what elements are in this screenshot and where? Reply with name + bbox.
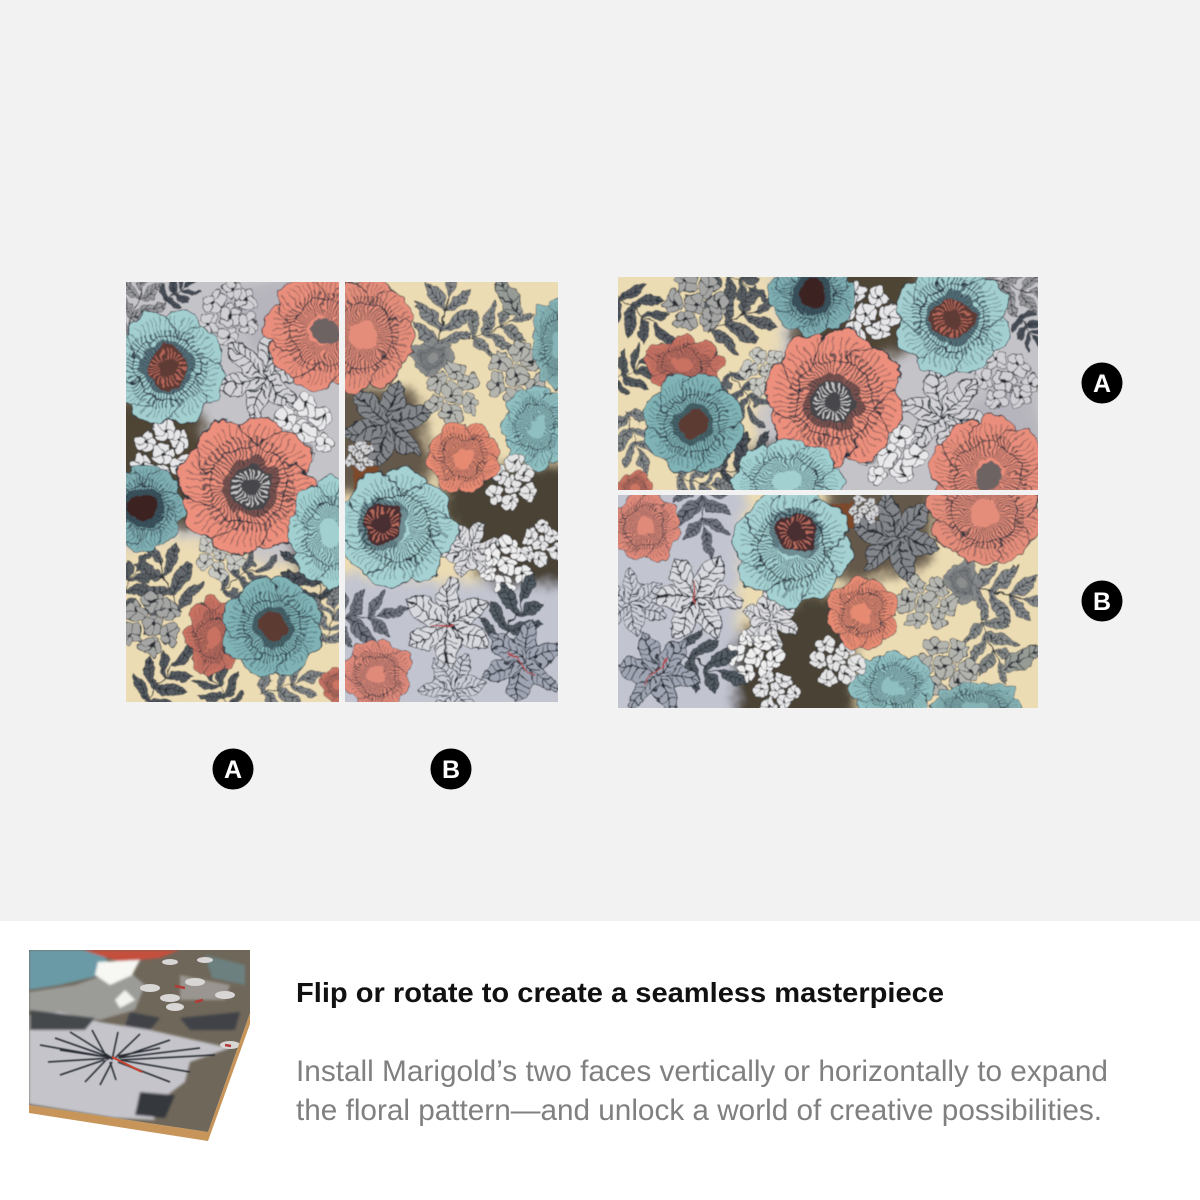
text block bbox=[296, 977, 1108, 1127]
floral board B, horizontal bbox=[618, 495, 1038, 708]
badge B, horizontal bbox=[1082, 580, 1122, 622]
panel: vertical layout bbox=[126, 282, 558, 790]
badge B, vertical: B bbox=[442, 756, 460, 784]
badge A, horizontal bbox=[1082, 362, 1122, 404]
badge A, vertical: A bbox=[224, 756, 242, 784]
photo: angled board with wooden edge bbox=[29, 950, 250, 1141]
floral board A, horizontal bbox=[618, 277, 1038, 490]
badge B, vertical bbox=[430, 748, 472, 790]
heading: Flip or rotate to create a seamless masterpiece bbox=[296, 977, 944, 1008]
panel: horizontal layout bbox=[618, 277, 1122, 708]
floral board B, vertical bbox=[345, 282, 558, 702]
body text: Install Marigold’s two faces vertically or horizontally to expand bbox=[296, 1055, 1108, 1088]
floral board A, vertical bbox=[126, 282, 339, 702]
body text bbox=[296, 1055, 1108, 1127]
badge A, vertical bbox=[212, 748, 254, 790]
badge A, horizontal: A bbox=[1093, 370, 1111, 398]
body text: the floral pattern—and unlock a world of creative possibilities. bbox=[296, 1094, 1102, 1127]
bottom white band bbox=[0, 921, 1200, 1200]
page background bbox=[0, 0, 1200, 921]
badge B, horizontal: B bbox=[1093, 588, 1111, 616]
